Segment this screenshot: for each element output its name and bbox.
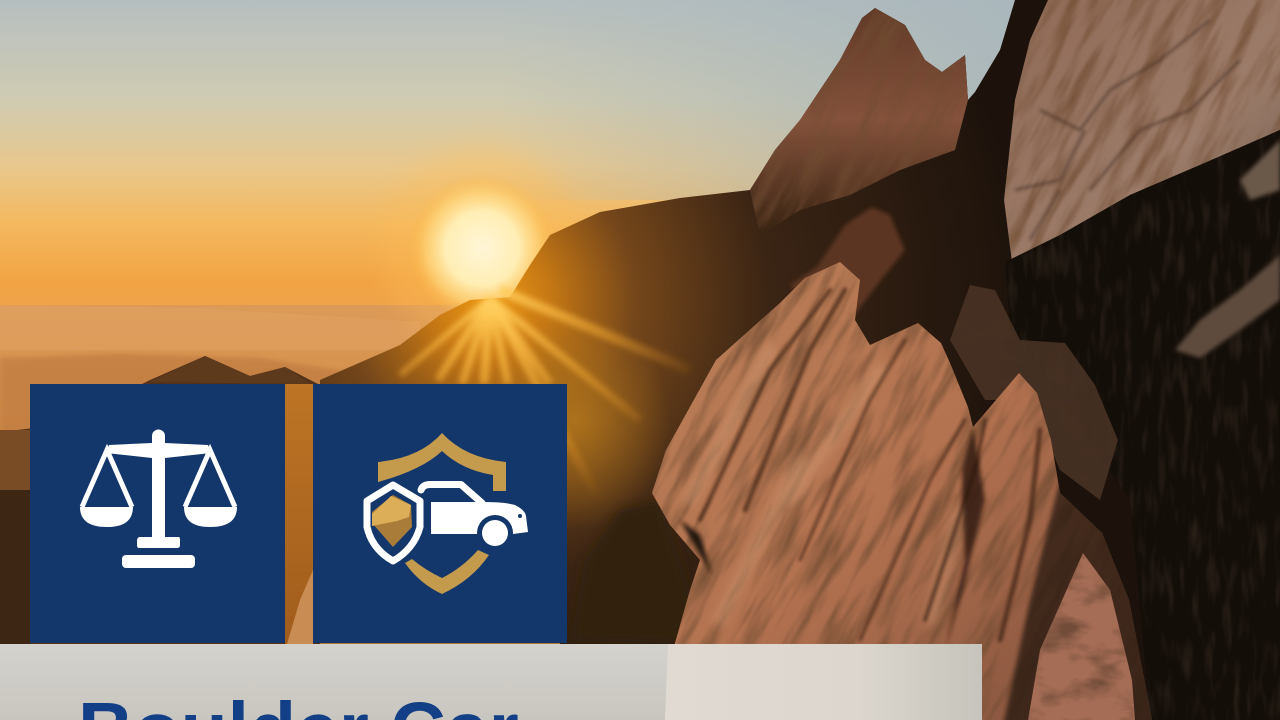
- lower right pinnacle: [1028, 553, 1135, 720]
- lower shadow slope: [570, 500, 700, 645]
- strip between icon tiles: [285, 384, 313, 644]
- tile: car insurance shield: [313, 384, 567, 643]
- shaded right flank: [1002, 480, 1152, 720]
- rock highlights: [690, 350, 960, 620]
- sun glow: [382, 148, 582, 348]
- dark rock knobs: [950, 285, 1118, 500]
- distant hazy plains: [0, 305, 560, 650]
- rock cracks: [700, 290, 1040, 640]
- tile: scales of justice: [30, 384, 285, 643]
- side rock patches: [1175, 140, 1280, 358]
- icon: car: [421, 484, 528, 551]
- foreground pinnacle: [652, 262, 1152, 720]
- dark forest: [1000, 130, 1280, 720]
- icon: scales: [80, 430, 237, 568]
- upper fin: [790, 207, 905, 340]
- title panel: [0, 644, 982, 720]
- main ridge silhouette: [320, 0, 1280, 720]
- icon: small shield: [367, 485, 420, 561]
- sky: [0, 0, 1280, 330]
- sun rays: [400, 290, 690, 510]
- right cliff face: [1004, 0, 1280, 259]
- sun disc: [408, 174, 556, 322]
- lower golden glow: [480, 310, 670, 530]
- summit peak: [750, 8, 968, 228]
- icon: gold shield: [378, 433, 506, 594]
